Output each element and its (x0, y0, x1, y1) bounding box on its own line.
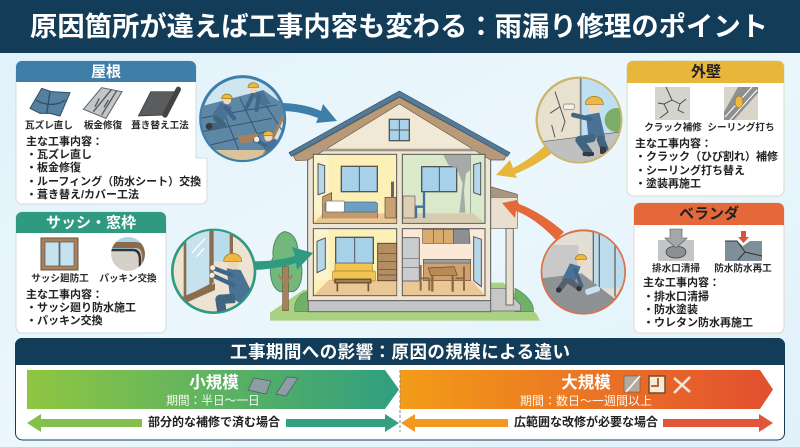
room: living (313, 229, 397, 296)
work list: ・板金修復 (26, 160, 81, 174)
arrow: extensive renovation: 広範囲な改修が必要な場合 (514, 414, 658, 429)
veranda and posts (491, 187, 521, 311)
worker (209, 253, 251, 317)
icon labels: 葺き替え工法 (131, 120, 189, 132)
panel: roof (16, 61, 207, 204)
foundation (308, 301, 491, 312)
scene: wall crack repair (536, 76, 622, 164)
icon: sealing (724, 87, 758, 120)
bar: large scale (400, 370, 773, 409)
icon labels: シーリング打ち (707, 122, 775, 134)
work list (635, 136, 778, 190)
panel: construction period (15, 338, 785, 440)
panel: exterior wall (627, 61, 784, 196)
divider (399, 370, 401, 432)
panel header (627, 61, 784, 83)
panel header: ベランダ (679, 204, 739, 222)
icon labels: 防水防水再工 (714, 262, 772, 274)
walls (308, 151, 491, 301)
panel header (15, 338, 785, 365)
work list: ・クラック（ひび割れ）補修 (635, 149, 778, 163)
roof (289, 91, 510, 161)
arrow: partial repair (27, 414, 399, 432)
icon labels (31, 272, 157, 284)
bar: small scale: 期間：半日〜一日 (166, 394, 260, 408)
worker: upper roofer (246, 83, 271, 110)
icon labels (652, 262, 772, 274)
bar: large scale: 期間：数日〜一週間以上 (520, 393, 652, 408)
worker (556, 254, 601, 295)
panel header (16, 61, 196, 82)
bar: large scale: 大規模 (561, 373, 611, 392)
icon: gasket (111, 237, 145, 272)
icons: large scale (624, 376, 690, 393)
work list: ・瓦ズレ直し (26, 147, 92, 161)
worker: left roofer (206, 94, 234, 130)
arrow: veranda (502, 200, 564, 240)
icon labels: パッキン交換 (99, 272, 157, 284)
work list: ・塗装再施工 (635, 176, 701, 190)
icon labels: 板金修復 (84, 120, 123, 132)
work list: ・シーリング打ち替え (635, 163, 745, 177)
bar: small scale: 小規模 (189, 373, 239, 392)
panel: veranda (634, 203, 784, 333)
icon labels (25, 120, 189, 132)
title: 原因箇所が違えば工事内容も変わる：雨漏り修理のポイント (30, 11, 768, 42)
work list: ・ルーフィング（防水シート）交換 (26, 174, 201, 188)
icons: small scale (248, 377, 298, 396)
work list: ・排水口清掃 (643, 289, 709, 303)
work list (26, 287, 136, 327)
icon: drain (658, 229, 694, 261)
tree (270, 232, 302, 311)
panel header: 外壁 (691, 62, 721, 80)
arrow: extensive renovation (401, 414, 773, 432)
icon labels: 排水口清掃 (652, 262, 700, 274)
work list: 主な工事内容： (643, 275, 720, 289)
house cutaway (289, 91, 521, 312)
work list: ・防水塗装 (643, 302, 698, 316)
title bar (0, 0, 800, 53)
icon labels: クラック補修 (644, 122, 702, 134)
panel header (16, 212, 166, 233)
worker (573, 96, 606, 156)
icon labels: サッシ廻防工 (31, 272, 89, 284)
icon: crack (655, 87, 690, 120)
bushes (295, 292, 308, 312)
panel header: 工事期間への影響：原因の規模による違い (230, 342, 570, 362)
icon labels (644, 122, 775, 134)
scene: window worker (172, 227, 255, 317)
panel header (634, 203, 784, 225)
panel: sash and window frame (16, 212, 166, 333)
work list: ・ウレタン防水再施工 (643, 315, 753, 329)
worker: lower roofer (252, 130, 278, 152)
work list: ・パッキン交換 (26, 313, 103, 327)
attic window (389, 119, 409, 141)
arrow: window (250, 247, 313, 270)
room: study with leak stain (402, 154, 485, 223)
arrow: partial repair: 部分的な補修で済む場合 (148, 414, 280, 429)
ground and tree (270, 232, 540, 321)
bar: small scale (27, 370, 399, 409)
panel header: 屋根 (91, 64, 121, 80)
arrow: wall (496, 138, 560, 178)
work list (643, 275, 753, 329)
scene: veranda waterproofing (542, 230, 625, 317)
work list: 主な工事内容： (26, 134, 103, 148)
room: bedroom (313, 154, 397, 223)
icon labels: 瓦ズレ直し (25, 120, 73, 132)
icon: waterproofing (725, 231, 762, 261)
work list: ・サッシ廻り防水施工 (26, 300, 136, 314)
work list: 主な工事内容： (26, 287, 103, 301)
panel header: サッシ・窓枠 (46, 214, 136, 232)
arrow: roof (280, 103, 337, 123)
work list: ・葺き替え/カバー工法 (26, 187, 139, 201)
icon: window (41, 238, 78, 270)
room: kitchen (402, 229, 485, 296)
work list: 主な工事内容： (635, 136, 712, 150)
scene: roofers (197, 77, 287, 165)
icons: roof repairs (30, 88, 178, 118)
work list (26, 134, 201, 201)
